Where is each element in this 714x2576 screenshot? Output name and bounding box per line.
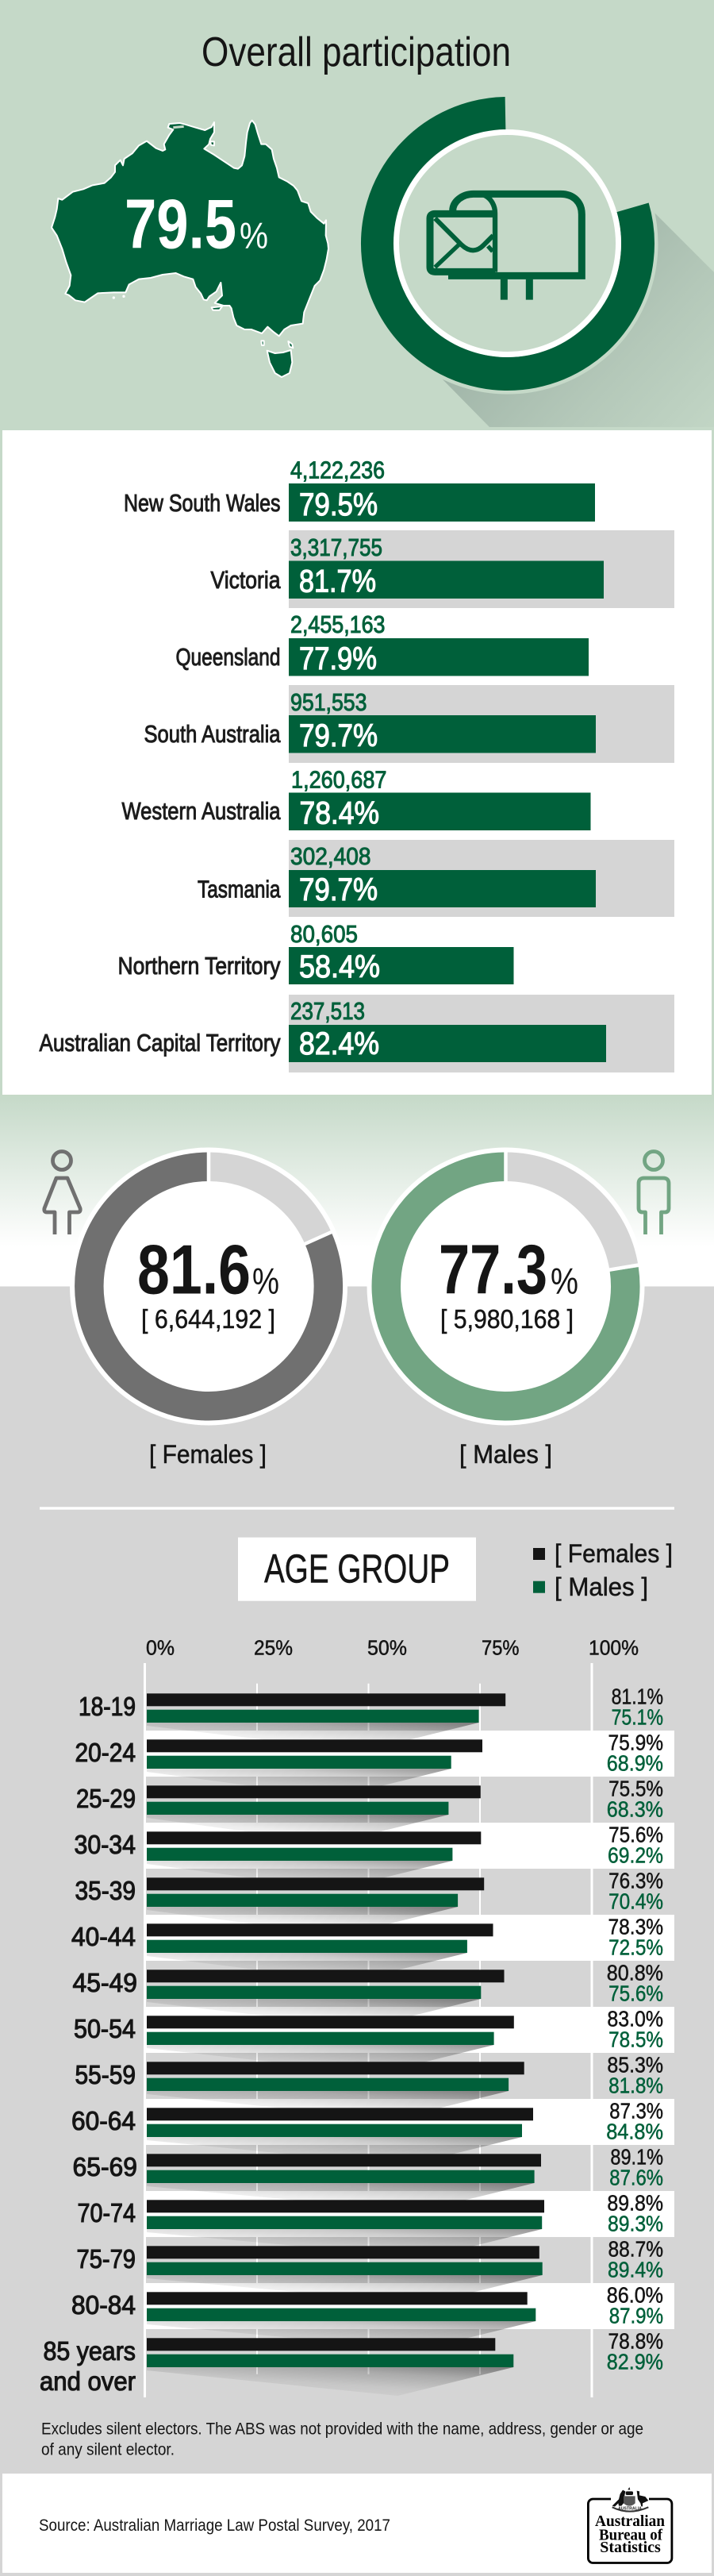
row: South Australia: 79.7% [299,718,378,753]
row: 35-39: 76.3% [608,1869,663,1893]
female percentage: 81.6 [137,1230,251,1308]
row: 70-74: 70-74 [78,2198,136,2228]
row: 70-74: 89.8% [607,2191,663,2216]
legend [533,1539,673,1601]
row: 20-24: 68.9% [607,1751,663,1776]
row: Western Australia: 78.4% [300,795,379,830]
row: Northern Territory: Northern Territory [117,952,281,980]
row: South Australia [144,688,596,753]
row: 65-69: 89.1% [610,2145,663,2170]
row: 45-49: 45-49 [73,1968,137,1997]
row: Tasmania [198,842,596,907]
row: 85 years and over: 85 years [43,2336,136,2366]
row: Western Australia: 1,260,687 [291,765,387,794]
arc: participating males [386,1167,625,1406]
row: Tasmania: Tasmania [198,875,281,903]
row: 50-54: 83.0% [607,2007,663,2031]
row: 60-64: 84.8% [606,2120,663,2144]
row: 30-34: 75.6% [608,1823,663,1847]
row: Tasmania: 79.7% [299,872,378,907]
row: 85 years and over [40,2329,663,2396]
row: 45-49: 80.8% [607,1961,663,1985]
row: 60-64 [71,2099,663,2144]
row: 85 years and over: and over [40,2366,136,2396]
arc: non-participating males [506,1167,624,1269]
row: 75-79: 88.7% [608,2237,663,2262]
row: 35-39: 35-39 [75,1876,136,1905]
logo: Australian Bureau of Statistics: Australian [595,2512,666,2530]
long shadow of participation ring [442,213,714,427]
icon: map of Australia with overall figure [52,121,328,377]
row: 40-44: 40-44 [71,1922,136,1951]
icon: female figure [44,1151,80,1234]
row: 25-29: 75.5% [608,1777,663,1801]
donut: males [367,1148,644,1426]
heading: age group [238,1538,476,1601]
row: 40-44: 78.3% [608,1915,663,1939]
row: 50-54 [74,2007,663,2052]
axis labels [146,1635,639,1659]
axis labels: 0% [146,1635,175,1659]
ring: 79.5 percent arc [378,114,638,374]
row: 35-39 [75,1869,663,1914]
row: Northern Territory: 80,605 [290,920,358,948]
row: South Australia: South Australia [144,720,281,748]
panel: participation by state [2,430,712,1095]
row: Northern Territory [117,920,514,984]
row: 80-84: 87.9% [609,2304,663,2328]
heading: age group: AGE GROUP [264,1546,450,1591]
panel: overall participation background [0,0,714,1095]
row: 80-84: 86.0% [607,2283,663,2308]
axis labels: 50% [367,1635,407,1659]
row: 80-84 [71,2283,663,2328]
source note: Source: Australian Marriage Law Postal Survey, 2017 [39,2516,390,2535]
icon: male figure [639,1151,669,1234]
panel: footer [2,2474,712,2573]
row: 85 years and over: 82.9% [607,2350,663,2374]
row: 65-69: 65-69 [73,2152,137,2181]
row: 18-19 [79,1685,663,1730]
row: 50-54: 78.5% [608,2027,663,2052]
arc: non-participating females [209,1167,318,1238]
axis labels: 25% [254,1635,293,1659]
male count: [ 5,980,168 ] [440,1304,574,1334]
footnote [41,2420,643,2459]
label: males: [ Males ] [459,1440,552,1469]
row: 45-49: 75.6% [608,1981,663,2006]
row: 65-69: 87.6% [609,2166,663,2190]
axis labels: 75% [482,1635,519,1659]
male percentage: 77.3 [439,1230,547,1308]
row: 18-19: 75.1% [612,1705,663,1730]
percent sign: % [551,1261,578,1302]
participation ring with mailbox icon [378,114,656,392]
row: New South Wales: New South Wales [124,489,281,517]
panel: gender gradient background [0,1095,714,1246]
title: Overall participation [202,29,511,75]
row: 85 years and over: 78.8% [608,2329,663,2354]
row: 40-44: 72.5% [608,1935,663,1960]
overall percentage: 79.5 [125,184,236,264]
panel: grey lower background [0,1286,714,2576]
row: 60-64: 87.3% [609,2099,663,2124]
row: 70-74 [78,2191,663,2236]
row: 75-79 [76,2237,663,2282]
row: 60-64: 60-64 [71,2106,136,2135]
row: 55-59: 85.3% [607,2053,663,2077]
arc: participating females [89,1167,328,1406]
footnote: of any silent elector. [41,2440,175,2459]
footnote: Excludes silent electors. The ABS was not provided with the name, address, gender or age [41,2420,643,2439]
row: 18-19: 18-19 [79,1692,136,1721]
row: 18-19: 81.1% [612,1685,663,1709]
legend: [ Females ] [555,1539,673,1568]
row: Victoria: Victoria [211,566,281,594]
row: 65-69 [73,2145,663,2190]
row: New South Wales: 79.5% [299,487,378,522]
row: Tasmania: 302,408 [290,842,371,870]
inner white ring [397,132,619,354]
row: Victoria [211,533,604,599]
icon: coat of arms [612,2487,648,2512]
row: 30-34: 69.2% [608,1843,663,1868]
logo: Australian Bureau of Statistics: Statistics [600,2539,661,2556]
row: 75-79: 75-79 [76,2244,136,2274]
row: 55-59: 55-59 [75,2060,136,2089]
logo: Australian Bureau of Statistics: AUSTRALIA [618,2507,642,2512]
logo: Australian Bureau of Statistics [588,2487,672,2563]
row: 30-34: 30-34 [75,1830,136,1859]
row: 25-29 [76,1777,663,1822]
row: New South Wales [124,456,595,522]
row: 55-59: 81.8% [608,2074,663,2098]
row: Australian Capital Territory: 82.4% [299,1026,379,1061]
percent sign: % [252,1261,279,1302]
row: Western Australia: Western Australia [122,797,281,825]
row: 35-39: 70.4% [608,1889,663,1914]
row: 70-74: 89.3% [608,2212,663,2236]
row: Victoria: 3,317,755 [290,533,382,561]
row: South Australia: 951,553 [290,688,367,716]
row: 20-24 [75,1731,663,1776]
row: Western Australia [122,765,590,830]
axis labels: 100% [589,1635,639,1659]
row: 25-29: 25-29 [76,1784,136,1813]
row: 25-29: 68.3% [607,1797,663,1822]
row: Australian Capital Territory: Australian Capital Territory [40,1029,281,1057]
logo: Australian Bureau of Statistics: Bureau of [599,2526,663,2543]
row: Queensland: Queensland [176,643,281,671]
row: 20-24: 75.9% [608,1731,663,1755]
chart: participation by age group [40,1635,674,2397]
row: Northern Territory: 58.4% [299,949,380,984]
row: 20-24: 20-24 [75,1738,136,1767]
row: Australian Capital Territory [40,997,606,1062]
legend: [ Males ] [555,1573,648,1601]
row: 30-34 [75,1823,663,1868]
row: 40-44 [71,1915,663,1960]
female count: [ 6,644,192 ] [141,1304,275,1334]
row: Queensland: 2,455,163 [290,610,386,638]
row: Australian Capital Territory: 237,513 [290,997,365,1025]
percent sign: % [240,214,268,256]
row: Queensland [176,610,589,676]
label: females: [ Females ] [149,1440,267,1469]
row: 50-54: 50-54 [74,2014,136,2043]
row: 80-84: 80-84 [71,2290,136,2320]
row: Queensland: 77.9% [299,641,377,676]
donut: females [70,1148,347,1426]
row: 75-79: 89.4% [608,2258,663,2282]
row: 45-49 [73,1961,663,2006]
row: New South Wales: 4,122,236 [290,456,385,484]
icon: mailbox with envelope [430,194,582,300]
row: Victoria: 81.7% [299,564,376,599]
row: 55-59 [75,2053,663,2098]
